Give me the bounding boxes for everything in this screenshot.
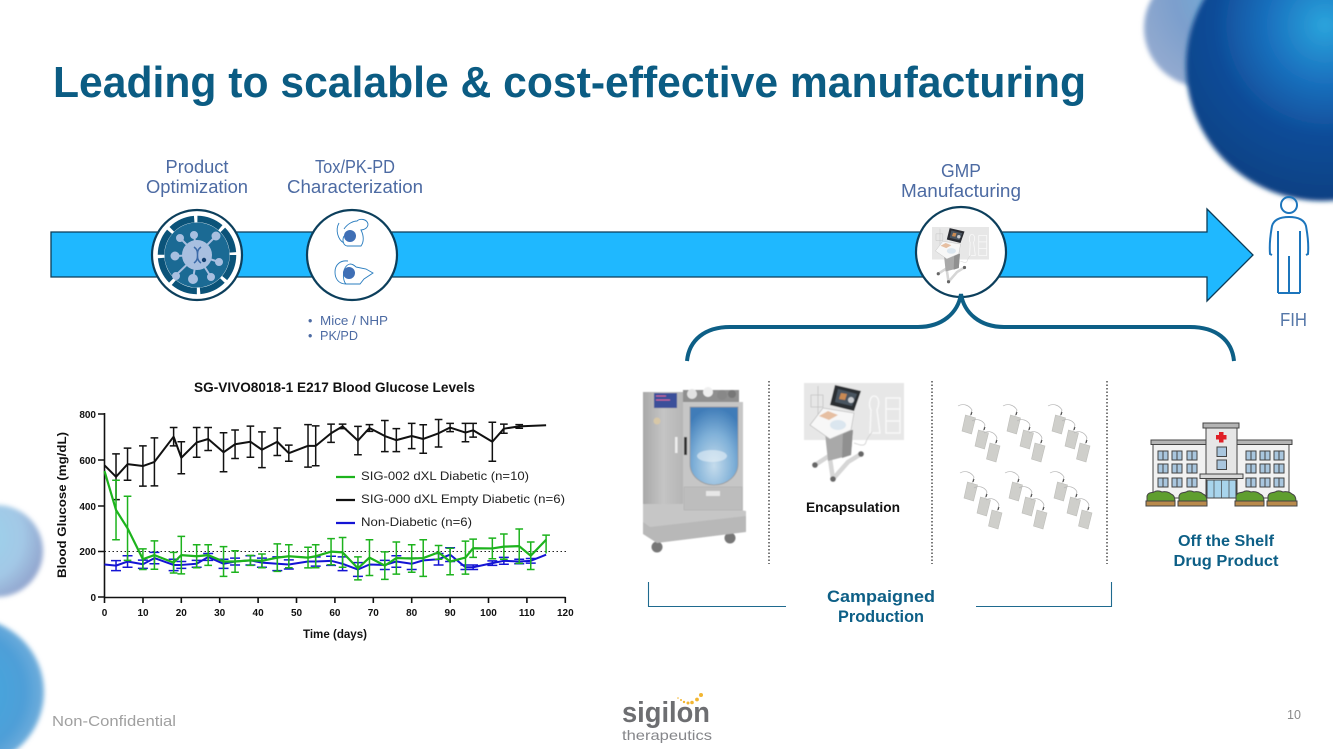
step heading: gmp manufacturing: Manufacturing [901, 181, 1021, 201]
label: off the shelf drug product: Drug Product [1174, 553, 1279, 570]
divider 3 [1106, 381, 1108, 564]
threshold dotted line [104, 550, 566, 552]
x tick labels: 70 [368, 608, 379, 619]
image: bioreactor machine [643, 387, 746, 552]
x tick labels: 20 [176, 608, 187, 619]
chart title: SG-VIVO8018-1 E217 Blood Glucose Levels [194, 379, 475, 395]
bullet list: mice / NHP, PK/PD: • [308, 329, 312, 343]
icon: first in human figure [1270, 197, 1308, 293]
axes [98, 413, 566, 603]
logo dots [677, 693, 703, 704]
icon: mouse [335, 261, 373, 284]
bullet list: mice / NHP, PK/PD: Mice / NHP [320, 314, 388, 328]
y tick labels: 0 [90, 593, 96, 604]
x tick labels: 80 [406, 608, 418, 619]
logo: sigilon therapeutics: sigilon [622, 697, 710, 729]
brace connector [687, 294, 1234, 361]
x tick labels: 90 [445, 608, 456, 619]
decorative cell: left lower bubble [0, 618, 44, 749]
x tick labels: 30 [214, 608, 226, 619]
icon: tox animal models circle [307, 210, 397, 300]
y tick labels: 200 [79, 547, 96, 558]
x tick labels: 50 [291, 608, 302, 619]
step heading: tox/pk-pd characterization: Tox/PK-PD [315, 157, 395, 177]
step heading: product optimization: Product [166, 157, 228, 177]
image: encapsulation device [804, 383, 904, 482]
step heading: tox/pk-pd characterization: Characterization [287, 177, 423, 197]
label: campaigned production: Production [838, 607, 924, 626]
x tick labels: 100 [480, 608, 497, 619]
divider 2 [931, 381, 933, 564]
label: campaigned production: Campaigned [827, 587, 935, 606]
series: SIG-002 diabetic [104, 471, 550, 580]
chart legend: Non-Diabetic (n=6) [361, 515, 472, 529]
icon: monkey [337, 219, 368, 246]
series: SIG-000 empty diabetic [104, 420, 546, 500]
x tick labels: 0 [102, 608, 108, 619]
divider 1 [768, 381, 770, 564]
bullet list: mice / NHP, PK/PD: • [308, 314, 312, 328]
y tick labels: 600 [79, 456, 96, 467]
logo: sigilon therapeutics [622, 693, 712, 743]
label: encapsulation: Encapsulation [806, 500, 900, 515]
icon: product optimization virus circle [152, 210, 242, 300]
series: non-diabetic [104, 548, 546, 576]
bullet list: mice / NHP, PK/PD: PK/PD [320, 329, 358, 343]
chart: blood glucose levels [57, 379, 574, 641]
footer: non-confidential: Non-Confidential [52, 713, 176, 730]
decorative cell: left upper bubble [0, 505, 43, 597]
chart legend: SIG-002 dXL Diabetic (n=10) [361, 469, 529, 483]
y tick labels: 800 [79, 410, 96, 421]
timeline arrow [51, 209, 1253, 301]
step heading: gmp manufacturing: GMP [941, 161, 981, 181]
title: Leading to scalable & cost-effective manufacturing [53, 58, 1086, 107]
image: drug product bags [958, 405, 1092, 529]
label: FIH: FIH [1280, 310, 1307, 330]
icon: hospital [1146, 423, 1297, 506]
logo: sigilon therapeutics: therapeutics [622, 727, 712, 743]
step heading: product optimization: Optimization [146, 177, 248, 197]
x tick labels: 10 [137, 608, 149, 619]
x axis label: Time (days) [303, 629, 367, 641]
series plot area [104, 420, 550, 580]
y tick labels: 400 [79, 502, 96, 513]
y axis label: Blood Glucose (mg/dL) [57, 432, 69, 578]
chart legend [336, 469, 565, 529]
bracket: campaigned production [648, 582, 1112, 606]
x tick labels: 120 [557, 608, 574, 619]
page number: 10 [1287, 708, 1301, 722]
decorative cell: top right small bubble [1144, 0, 1262, 87]
x tick labels: 40 [253, 608, 264, 619]
x tick labels: 60 [329, 608, 341, 619]
chart legend: SIG-000 dXL Empty Diabetic (n=6) [361, 492, 565, 506]
label: off the shelf drug product: Off the Shelf [1178, 533, 1275, 550]
icon: gmp encapsulation circle [916, 207, 1006, 297]
x tick labels: 110 [519, 608, 535, 619]
decorative cell: top right large bubble [1186, 0, 1333, 201]
